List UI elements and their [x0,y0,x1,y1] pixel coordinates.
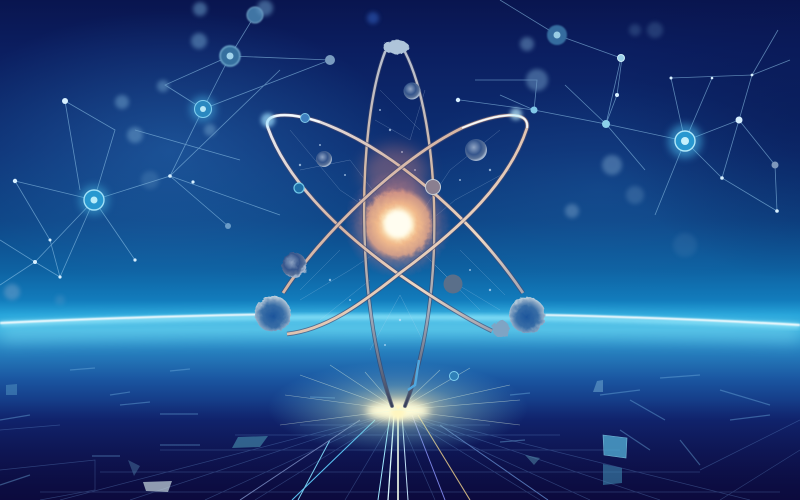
floor speckle data marks [0,368,770,485]
vertical orbit [364,52,434,406]
network: left cluster [0,0,335,305]
diagonal orbit: top-right to bottom-left [283,115,527,334]
nucleus glow [344,170,452,278]
nucleus core [384,210,412,238]
network: right cluster [367,0,790,257]
blurred left bokeh [4,0,273,305]
electron: blue ring left [294,183,304,193]
orbit mesh sparkles [299,109,491,346]
orbit highlights [261,108,527,128]
electron: big left [255,296,291,332]
digital floor: perspective grid [0,368,800,500]
electron: top [383,40,409,54]
data cards on floor [6,380,627,492]
electrons [255,40,545,390]
electron: upper left [316,151,332,167]
blurred right bokeh [367,12,697,257]
electron: lower right [444,274,462,294]
atom [255,40,545,406]
diagonal orbit: top-left to bottom-right [267,115,523,331]
lighter haze in the sky [0,0,800,300]
bright perspective rays [240,415,548,500]
electron: upper right [465,139,487,161]
pink halo above nucleus [363,146,427,198]
electron: lower ring [450,372,458,380]
electron: small right [492,320,510,338]
icon: glowing right nodes [547,25,702,158]
electron: lower helix [408,360,419,390]
electron: big right [509,297,545,333]
light burst at atom base [268,362,528,454]
horizon glow line [0,314,800,342]
electron: upper vertical [404,82,420,100]
electron: centre right [426,180,440,194]
orbit interior mesh [290,90,510,350]
electron: ring top-left [300,114,310,122]
icon: glowing left nodes [79,7,263,215]
electron: lower left [282,252,306,278]
